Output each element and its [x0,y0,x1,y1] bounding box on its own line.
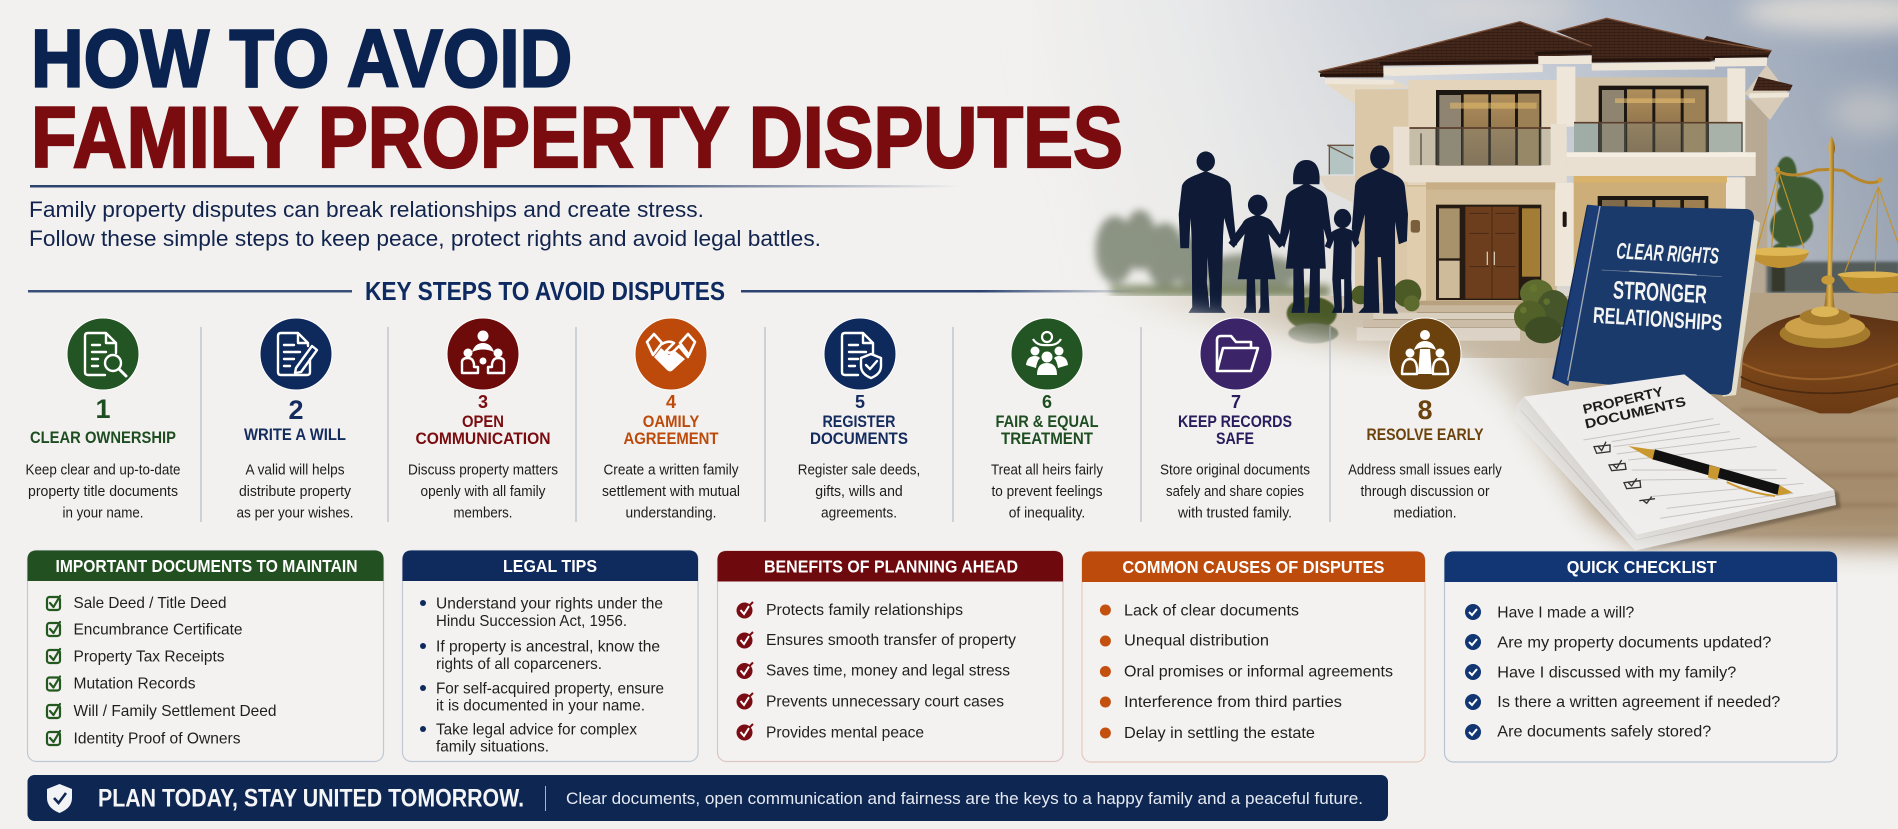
step 2: write a will: WRITE A WILL [244,425,346,444]
red check icons [736,602,753,740]
description: openly with all family [420,484,546,500]
document list: Identity Proof of Owners [74,730,240,747]
description: Keep clear and up-to-date [26,462,180,478]
orange dots [1100,604,1111,738]
tips list: it is documented in your name. [436,698,645,715]
upper right window [1599,86,1709,152]
tips list: rights of all coparceners. [436,656,602,673]
footer banner: Clear documents, open communication and fairness are the keys to a happy family and a peaceful future. [566,790,1363,808]
step 1: clear ownership: 1 [95,394,111,424]
table surface [1454,293,1898,567]
description: gifts, wills and [815,484,903,500]
document list [74,595,276,747]
family silhouette [1179,145,1408,314]
description: distribute property [239,484,352,500]
document heading: DOCUMENTS [1583,394,1687,432]
description: in your name. [62,506,144,522]
description: Store original documents [1160,462,1310,478]
description [1348,462,1502,522]
icon: handshake [635,318,707,390]
panel: important documents: IMPORTANT DOCUMENTS TO MAINTAIN [56,556,358,576]
document heading: PROPERTY [1581,384,1665,417]
icon: meeting people [447,318,519,390]
checklist [1497,604,1780,741]
document heading [1582,386,1686,428]
causes list [1124,602,1393,742]
description [1160,462,1310,522]
wooden base [1741,312,1898,413]
benefits list: Saves time, money and legal stress [766,662,1010,679]
sky [1147,0,1898,296]
main title: FAMILY PROPERTY DISPUTES [31,90,1123,186]
front door [1436,205,1541,300]
shrubs [1287,279,1570,343]
step 6: fair and equal treatment: TREATMENT [1001,429,1094,448]
fascia and pillars [1325,56,1789,302]
intro text: Family property disputes can break relationships and create stress. [29,197,704,222]
icon: document with magnifier [67,318,139,390]
document list: Will / Family Settlement Deed [74,703,276,720]
step 5: register documents: DOCUMENTS [810,429,908,448]
checklist: Are documents safely stored? [1497,724,1711,741]
upper left window [1436,90,1541,165]
benefits list: Prevents unnecessary court cases [766,693,1004,710]
roof [1318,18,1793,91]
panel: quick checklist: QUICK CHECKLIST [1567,557,1717,577]
step 3: open communication: COMMUNICATION [416,429,550,448]
causes list: Lack of clear documents [1124,602,1299,619]
description [798,462,920,522]
description: A valid will helps [246,462,344,478]
icon: document with shield check [824,318,896,390]
step 7: keep records safe: 7 [1231,392,1241,412]
panel: common causes of disputes [1082,552,1425,762]
icon: shield [47,784,72,813]
description: understanding. [626,506,716,522]
step 5: register documents: REGISTER [822,412,896,431]
house [1287,18,1793,343]
main title [31,14,1123,186]
description: safely and share copies [1166,484,1304,500]
footer banner [28,775,1388,821]
hero photo illustration [1090,0,1898,567]
document list: Sale Deed / Title Deed [74,595,226,612]
background trees [1095,210,1330,297]
description [408,462,558,522]
tips list: Understand your rights under the [436,595,663,612]
benefits list [766,602,1016,742]
father [1179,151,1237,313]
blue check icons [1465,604,1481,740]
step 7: keep records safe: SAFE [1216,429,1254,448]
icon: family mediation [1389,318,1461,390]
description: Treat all heirs fairly [991,462,1104,478]
step 6: fair and equal treatment: FAIR & EQUAL [996,412,1098,431]
description: with trusted family. [1177,506,1292,522]
intro text: Follow these simple steps to keep peace, protect rights and avoid legal battles. [29,226,821,251]
step 6: fair and equal treatment [991,318,1104,522]
description: through discussion or [1360,484,1490,500]
description: settlement with mutual [602,484,740,500]
description [602,462,740,522]
step 8: resolve early [1348,318,1502,522]
step 7: keep records safe: KEEP RECORDS [1178,412,1292,431]
pen [1628,446,1793,496]
benefits list: Protects family relationships [766,602,963,619]
section heading: key steps: KEY STEPS TO AVOID DISPUTES [365,278,725,306]
legal book [1552,205,1760,397]
checklist: Have I discussed with my family? [1497,664,1736,681]
tips list: Hindu Succession Act, 1956. [436,613,627,630]
right background tree and hills [1767,157,1898,293]
side terrace [1318,145,1355,203]
panel: legal tips [402,550,698,762]
step 2: write a will [236,318,354,522]
causes list: Interference from third parties [1124,694,1342,711]
tips list: Take legal advice for complex [436,721,637,738]
description: Address small issues early [1348,462,1502,478]
step 3: open communication: 3 [478,392,488,412]
intro text [29,197,821,251]
icon: document with pen [260,318,332,390]
description: to prevent feelings [992,484,1102,500]
description: members. [454,506,512,522]
causes list: Oral promises or informal agreements [1124,664,1393,681]
checklist: Have I made a will? [1497,604,1634,621]
scales of justice [1750,136,1898,348]
house walls [1325,65,1788,303]
panel: important documents [28,550,384,762]
book title: CLEAR RIGHTS [1616,237,1720,269]
description: as per your wishes. [236,506,354,522]
causes list: Unequal distribution [1124,633,1269,650]
benefits list: Ensures smooth transfer of property [766,632,1016,649]
panel: benefits of planning ahead [718,551,1063,762]
step 4: family agreement: 4 [666,392,676,412]
panel: quick checklist [1444,552,1837,762]
panel: common causes of disputes: COMMON CAUSES OF DISPUTES [1122,557,1384,577]
icon: folder [1200,318,1272,390]
step 4: family agreement: OAMILY [643,412,700,431]
description: of inequality. [1009,506,1085,522]
entry steps [1357,301,1523,341]
description [26,462,180,522]
book title [1594,242,1722,330]
panel: legal tips: LEGAL TIPS [503,556,597,576]
document list: Property Tax Receipts [74,648,224,665]
ground plaza [1108,296,1569,368]
mother [1279,160,1332,313]
tips list: family situations. [436,739,549,756]
step 1: clear ownership [26,318,180,522]
tips list: If property is ancestral, know the [436,638,660,655]
benefits list: Provides mental peace [766,725,924,742]
bullets [420,600,426,732]
description: mediation. [1394,506,1456,522]
tall father figure [1352,145,1408,314]
description: Create a written family [604,462,739,478]
step 8: resolve early: 8 [1417,395,1433,425]
book title: RELATIONSHIPS [1592,302,1723,336]
step 1: clear ownership: CLEAR OWNERSHIP [30,428,176,447]
document list: Encumbrance Certificate [74,621,243,638]
checklist: Is there a written agreement if needed? [1497,694,1780,711]
daughter [1228,195,1286,313]
lower right window and lamps [1411,196,1708,233]
tips list [436,595,664,756]
panel: benefits of planning ahead: BENEFITS OF PLANNING AHEAD [764,556,1018,576]
balcony slabs [1393,124,1756,190]
description: Register sale deeds, [798,462,920,478]
step 2: write a will: 2 [288,395,304,425]
step 5: register documents [798,318,920,522]
description: property title documents [28,484,178,500]
son [1325,209,1359,313]
causes list: Delay in settling the estate [1124,725,1315,742]
icon: group of people [1011,318,1083,390]
description: agreements. [821,506,897,522]
main title: HOW TO AVOID [31,14,572,104]
checklist: Are my property documents updated? [1497,634,1771,651]
step 4: family agreement: AGREEMENT [624,429,719,448]
description [991,462,1104,522]
tips list: For self-acquired property, ensure [436,680,664,697]
book title: STRONGER [1612,276,1708,309]
footer banner: PLAN TODAY, STAY UNITED TOMORROW. [98,784,524,812]
description [236,462,354,522]
balcony railings [1409,123,1743,165]
step 5: register documents: 5 [855,392,865,412]
checkbox icons [47,596,60,745]
description: Discuss property matters [408,462,558,478]
step 8: resolve early: RESOLVE EARLY [1366,425,1484,444]
property documents stack [1514,374,1841,554]
step 3: open communication: OPEN [462,412,504,431]
step 6: fair and equal treatment: 6 [1042,392,1052,412]
document list: Mutation Records [74,676,196,693]
step 3: open communication [408,318,558,522]
step 7: keep records safe [1160,318,1310,522]
step 4: family agreement [602,318,740,522]
